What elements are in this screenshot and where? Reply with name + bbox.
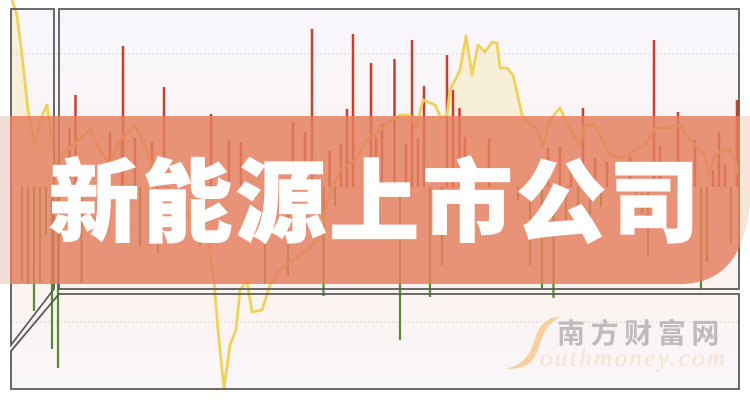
band main section (10, 116, 740, 284)
logo Chinese name: 南方财富网 (557, 317, 725, 349)
frame: main chart panel (59, 9, 739, 289)
yellow line area fill (12, 0, 530, 187)
red up bars (70, 29, 737, 187)
frame: left narrow panel (11, 9, 54, 345)
frame: lower volume panel (11, 294, 739, 389)
logo swoosh (504, 316, 561, 369)
logo domain: outhmoney.com (540, 345, 727, 372)
dotted reference lines (12, 54, 738, 322)
watermark: southmoney logo (504, 316, 727, 372)
green down bars (22, 187, 731, 368)
title: 新能源上市公司 (49, 154, 703, 254)
band right margin (740, 116, 750, 246)
band left margin (0, 116, 10, 284)
title band (0, 116, 750, 284)
